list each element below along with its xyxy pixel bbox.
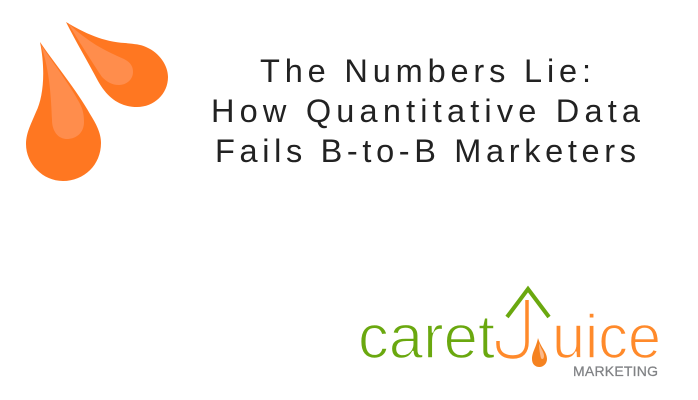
title [211, 53, 641, 169]
logo drop [532, 338, 547, 367]
title: Fails B-to-B Marketers [215, 133, 636, 169]
logo word: uice: uice [552, 303, 661, 372]
logo caret arrow [507, 289, 549, 317]
icon: small orange drop [66, 22, 168, 107]
logo letter J [498, 300, 527, 357]
title: The Numbers Lie: [260, 53, 591, 89]
icon: large orange drop [26, 42, 101, 181]
title: How Quantitative Data [211, 93, 641, 129]
logo: caretJuice Marketing [358, 289, 661, 379]
logo word: caret: caret [358, 303, 495, 372]
logo tagline: MARKETING [573, 363, 658, 379]
